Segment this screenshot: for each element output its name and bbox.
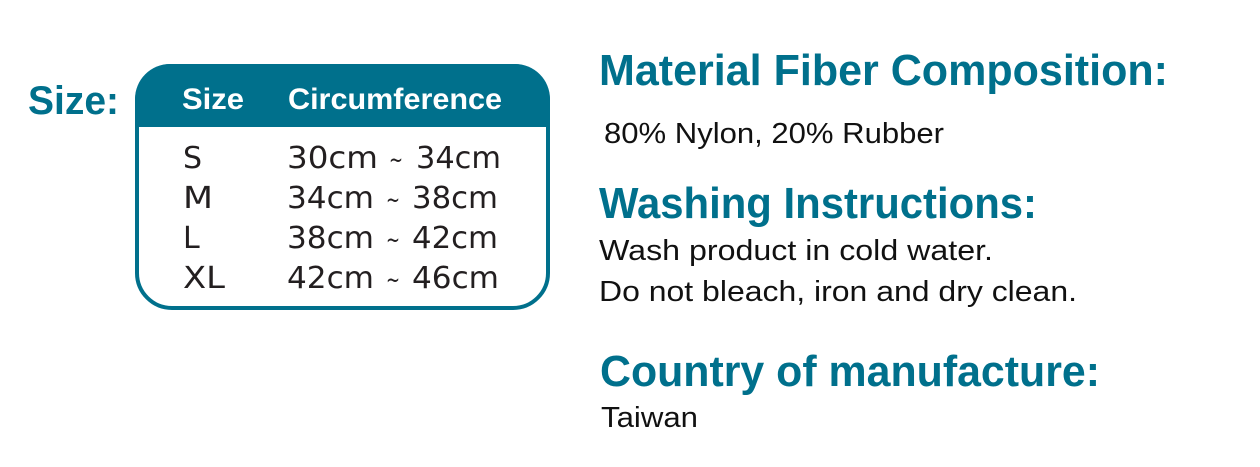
row M: 34cm [287, 181, 374, 216]
row S: S [183, 141, 202, 176]
row XL: XL [183, 261, 225, 296]
heading: washing: Washing Instructions: [599, 179, 1037, 228]
column heading: circumference: Circumference [288, 83, 502, 116]
table header band [135, 64, 550, 127]
row S: 30cm [287, 141, 378, 176]
country text: Taiwan [601, 402, 698, 434]
material text: 80% Nylon, 20% Rubber [604, 118, 944, 150]
heading: material: Material Fiber Composition: [599, 46, 1168, 95]
row XL: 46cm [412, 261, 499, 296]
row S [183, 141, 501, 176]
heading: country: Country of manufacture: [600, 347, 1100, 396]
row M: 38cm [412, 181, 498, 216]
column heading: size: Size [182, 83, 244, 116]
row XL: ~ [386, 266, 400, 294]
row S: 34cm [416, 141, 501, 176]
row M: M [183, 181, 213, 216]
size table [135, 64, 550, 308]
row S: ~ [389, 146, 403, 174]
size label: Size: [28, 79, 119, 123]
washing text line 1: Wash product in cold water. [599, 235, 993, 267]
row L: ~ [386, 226, 400, 254]
row M: ~ [386, 186, 400, 214]
row M [183, 181, 498, 216]
table frame [137, 66, 548, 308]
row L: 38cm [287, 221, 374, 256]
row XL: 42cm [287, 261, 374, 296]
row XL [183, 261, 499, 296]
row L: 42cm [412, 221, 498, 256]
row L: L [183, 221, 200, 256]
washing text line 2: Do not bleach, iron and dry clean. [599, 276, 1077, 308]
row L [183, 221, 498, 256]
